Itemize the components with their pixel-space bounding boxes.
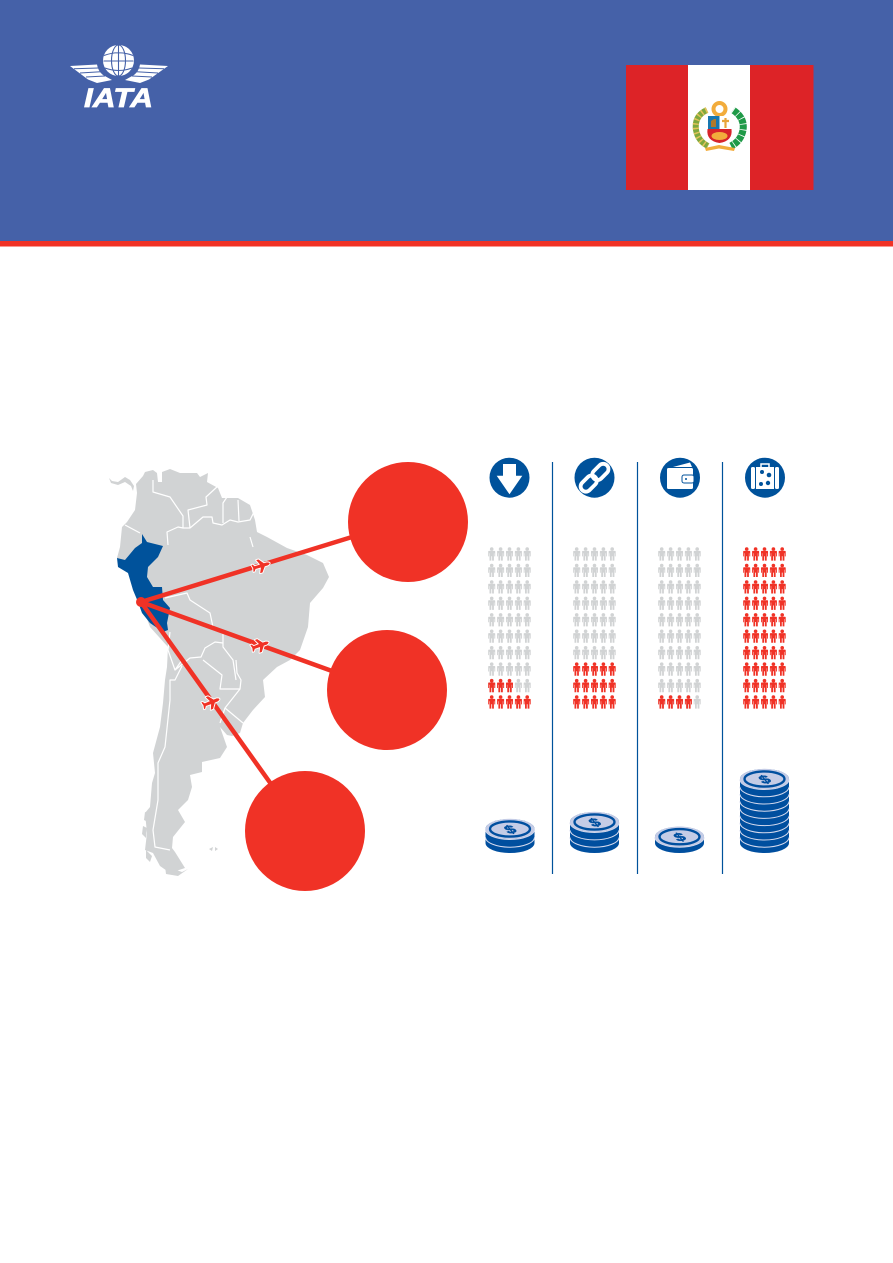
icon: right wing bbox=[125, 64, 168, 83]
icon: chain link bbox=[574, 458, 614, 498]
column dividers bbox=[552, 462, 722, 874]
country borders bbox=[125, 480, 255, 850]
continent bbox=[117, 469, 329, 873]
people chart 2 bbox=[573, 547, 616, 709]
Peru highlighted bbox=[117, 534, 170, 632]
icon: suitcase bbox=[745, 458, 785, 498]
IATA logo bbox=[70, 45, 168, 113]
islands bbox=[142, 812, 218, 876]
flag of Peru bbox=[626, 65, 814, 190]
Panama isthmus bbox=[109, 477, 134, 491]
coin stack 4 bbox=[740, 769, 789, 853]
destination circle 1 bbox=[348, 462, 468, 582]
route lines bbox=[141, 537, 352, 784]
people chart 1 bbox=[488, 547, 531, 709]
icon: plane route 1 bbox=[250, 557, 272, 575]
icon: plane route 2 bbox=[249, 636, 271, 655]
icon: down arrow bbox=[490, 458, 530, 498]
icon: plane route 3 bbox=[200, 693, 222, 712]
people chart 3 bbox=[658, 547, 701, 709]
origin dot bbox=[136, 597, 146, 607]
icon: coat of arms bbox=[696, 103, 743, 151]
icon: left wing bbox=[70, 64, 112, 83]
coin stack 1 bbox=[486, 819, 534, 853]
destination circle 2 bbox=[327, 630, 447, 750]
icon: wallet bbox=[660, 458, 700, 498]
header band bbox=[0, 0, 893, 246]
map: South America bbox=[109, 469, 329, 876]
logo wordmark: IATA bbox=[84, 83, 153, 113]
icon: globe bbox=[103, 45, 134, 76]
destination circle 3 bbox=[245, 771, 365, 891]
people chart 4 bbox=[743, 547, 786, 709]
coin stack 3 bbox=[655, 826, 704, 853]
coin stack 2 bbox=[570, 812, 619, 853]
